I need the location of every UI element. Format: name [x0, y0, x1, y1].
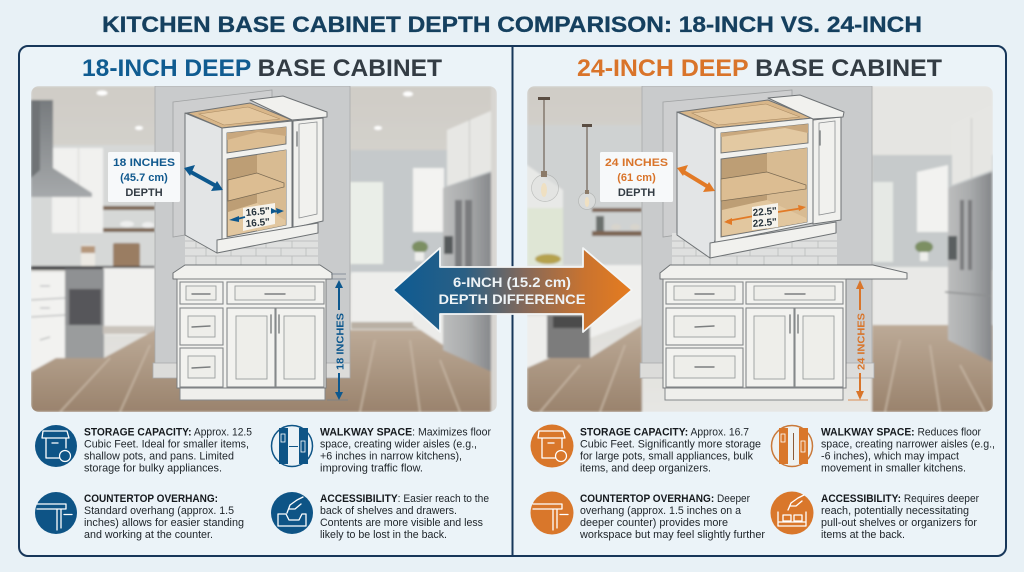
feature: accessibility: ACCESSIBILITY: Requires deeper [821, 493, 979, 505]
depth arrow: blue [184, 165, 223, 191]
feature: countertop overhang [530, 492, 765, 541]
feature: accessibility: pull-out shelves or organizers for [821, 517, 977, 529]
feature: storage capacity: STORAGE CAPACITY: Approx. 12.5 [84, 426, 252, 438]
feature: storage capacity: shallow pots, and pans. Limited [84, 450, 234, 462]
kitchen photo backdrop: left [31, 86, 497, 412]
icon: storage box [530, 424, 574, 468]
feature: walkway space [772, 426, 995, 474]
feature: countertop overhang: workspace but may feel slightly further [579, 529, 765, 541]
depth arrow: orange [677, 165, 715, 192]
inner width label: 22.5 in [724, 203, 806, 230]
feature: accessibility [271, 492, 489, 541]
title: KITCHEN BASE CABINET DEPTH COMPARISON: 18-INCH VS. 24-INCH [102, 12, 922, 37]
cabinet illustration: right [640, 86, 907, 400]
feature: walkway space [272, 426, 491, 474]
pendant lights [532, 97, 596, 210]
inner width label: 22.5 in: 22.5" [752, 217, 778, 230]
callout: 24 inches depth [600, 152, 673, 202]
heading: 18-inch: 18-INCH DEEP BASE CABINET [82, 55, 442, 82]
feature: storage capacity: for large pots, small appliances, bulk [580, 450, 753, 462]
feature: countertop overhang: deeper counter) provides more [580, 517, 728, 529]
icon: reaching hand [770, 492, 814, 534]
cabinet illustration: left [153, 86, 350, 400]
dimension: 18 inches height [327, 274, 348, 400]
inner width label: 16.5 in: 16.5" [245, 217, 271, 230]
feature: accessibility: reach, potentially necessitating [821, 505, 969, 517]
centre divider [512, 46, 514, 556]
feature: walkway space: +6 inches in narrow kitchens), [320, 450, 462, 462]
feature: walkway space: movement in smaller kitchens. [821, 462, 966, 474]
callout: 18 inches depth: DEPTH [125, 187, 163, 199]
countertop [173, 265, 332, 279]
callout: 24 inches depth: 24 INCHES [605, 157, 668, 169]
countertop [660, 265, 907, 279]
callout: 24 inches depth: DEPTH [618, 187, 655, 199]
wall pillar [640, 86, 874, 378]
feature: accessibility [770, 492, 979, 541]
arrow: 6-inch depth difference: DEPTH DIFFERENCE [438, 292, 586, 307]
feature: walkway space: improving traffic flow. [320, 462, 423, 474]
inner width label: 22.5 in: 22.5" [752, 206, 778, 219]
wall pillar [153, 86, 350, 378]
base cabinet [663, 279, 846, 400]
feature: walkway space: space, creating wider aisles (e.g., [320, 438, 477, 450]
feature: accessibility: items at the back. [821, 529, 905, 541]
dimension: 24 inches height [848, 280, 868, 400]
callout: 18 inches depth: 18 INCHES [113, 157, 175, 169]
feature: countertop overhang: Standard overhang (approx. 1.5 [84, 505, 234, 517]
feature: walkway space: WALKWAY SPACE: Reduces floor [821, 426, 981, 438]
dimension: 24 inches height: 24 INCHES [856, 313, 868, 370]
callout: 18 inches depth: (45.7 cm) [120, 172, 168, 184]
icon: countertop [530, 492, 574, 534]
wall cabinet [677, 95, 844, 258]
arrow: 6-inch depth difference [393, 248, 632, 332]
feature: storage capacity [530, 424, 761, 474]
icon: walkway [272, 426, 312, 466]
feature: countertop overhang: inches) allows for easier standing [84, 517, 244, 529]
feature: countertop overhang: COUNTERTOP OVERHANG: Deeper [580, 493, 750, 505]
panel: 24-inch cabinet [527, 55, 995, 541]
inner width label: 16.5 in [229, 203, 284, 231]
callout: 18 inches depth [108, 152, 180, 202]
feature: storage capacity: Cubic Feet. Significantly more storage [580, 438, 761, 450]
heading: 24-inch: 24-INCH DEEP BASE CABINET [577, 55, 942, 82]
feature: countertop overhang: and working at the counter. [84, 529, 213, 541]
feature: storage capacity: items, and deep organizers. [580, 462, 711, 474]
feature: countertop overhang [35, 492, 244, 541]
icon: reaching hand [271, 492, 313, 534]
feature: accessibility: likely to be lost in the back. [320, 529, 447, 541]
feature: walkway space: space, creating narrower aisles (e.g., [821, 438, 995, 450]
feature: countertop overhang: overhang (approx. 1.5 inches on a [580, 505, 742, 517]
wall cabinet [185, 96, 327, 253]
feature: accessibility: back of shelves and drawers. [320, 505, 457, 517]
inner width label: 16.5 in: 16.5" [245, 206, 271, 219]
feature: accessibility: Contents are more visible and less [320, 517, 483, 529]
feature: accessibility: ACCESSIBILITY: Easier reach to the [320, 493, 489, 505]
feature: storage capacity: storage for bulky appliances. [84, 462, 222, 474]
panel: 18-inch cabinet [31, 55, 497, 541]
feature: walkway space: WALKWAY SPACE: Maximizes floor [320, 426, 491, 438]
feature: storage capacity: STORAGE CAPACITY: Approx. 16.7 [580, 426, 749, 438]
icon: walkway [772, 426, 812, 466]
feature: countertop overhang: COUNTERTOP OVERHANG: [84, 493, 218, 505]
arrow: 6-inch depth difference: 6-INCH (15.2 cm) [453, 275, 571, 290]
kitchen photo backdrop: right [527, 86, 993, 412]
backsplash tiles [672, 233, 837, 265]
feature: storage capacity: Cubic Feet. Ideal for smaller items, [84, 438, 249, 450]
feature: walkway space: -6 inches), which may impact [821, 450, 959, 462]
backsplash tiles [185, 233, 318, 265]
dimension: 18 inches height: 18 INCHES [334, 313, 346, 370]
icon: countertop [35, 492, 77, 534]
callout: 24 inches depth: (61 cm) [617, 172, 656, 184]
base cabinet [177, 279, 326, 400]
feature: storage capacity [35, 425, 252, 474]
icon: storage box [35, 425, 77, 467]
